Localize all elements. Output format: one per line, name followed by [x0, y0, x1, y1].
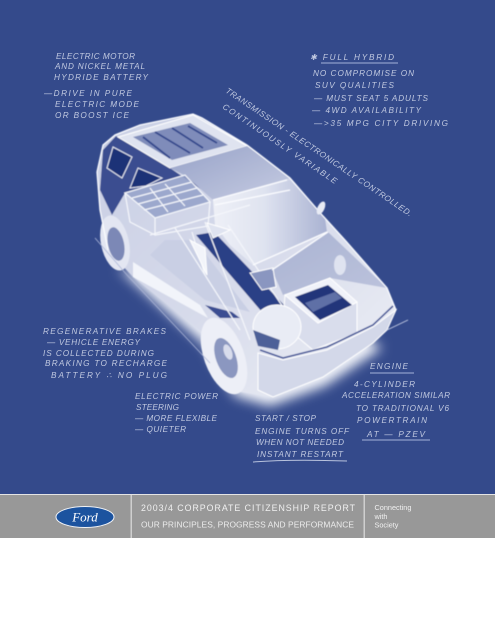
dark central band: [196, 232, 284, 318]
section name: [374, 503, 411, 530]
note: regenerative brakes: BATTERY ∴ NO PLUG: [51, 371, 168, 380]
section name: Connecting: [374, 503, 411, 512]
front wheel: [192, 312, 256, 400]
note: electric motor: HYDRIDE BATTERY: [54, 73, 149, 82]
note: full hybrid: ✱ FULL HYBRID: [310, 53, 394, 62]
body highlight edges: [97, 114, 396, 310]
Ford logo: [56, 506, 114, 528]
note: engine: 4-CYLINDER: [354, 380, 415, 389]
section name: with: [374, 512, 387, 521]
note: electric motor: [43, 52, 149, 120]
rear wheel: [95, 213, 135, 273]
mirror: [315, 200, 327, 216]
roof rack: [118, 115, 247, 168]
note: engine: ACCELERATION SIMILAR: [341, 391, 450, 400]
blueprint background: [0, 0, 495, 494]
cylinder: [334, 255, 346, 275]
note: regenerative brakes: REGENERATIVE BRAKES: [43, 327, 167, 336]
note: full hybrid: SUV QUALITIES: [315, 81, 395, 90]
note: regenerative brakes: BRAKING TO RECHARGE: [45, 359, 168, 368]
section name: Society: [374, 520, 399, 530]
note: electric motor: AND NICKEL METAL: [54, 62, 145, 71]
note: start stop: ENGINE TURNS OFF: [255, 427, 350, 436]
engine box: [283, 278, 357, 350]
note: full hybrid: — 4WD AVAILABILITY: [311, 106, 422, 115]
note: start stop: [253, 414, 350, 462]
report subtitle: OUR PRINCIPLES, PROGRESS AND PERFORMANCE: [141, 520, 354, 530]
illustration: transparent hybrid SUV: [95, 114, 408, 406]
note: full hybrid: [310, 53, 449, 128]
note: electric motor: ELECTRIC MOTOR: [56, 52, 135, 61]
note: engine: ENGINE: [370, 362, 409, 371]
note: electric power steering: — QUIETER: [134, 425, 186, 434]
hood: [272, 232, 387, 295]
leader line: [95, 238, 210, 363]
note: regenerative brakes: IS COLLECTED DURING: [43, 349, 155, 358]
car ground glow: [118, 268, 382, 406]
note: engine: TO TRADITIONAL V6: [356, 404, 449, 413]
windshield: [213, 180, 327, 265]
footer band: [0, 494, 495, 538]
roof panel: [170, 146, 290, 200]
note: electric motor: ELECTRIC MODE: [55, 100, 140, 109]
motor cluster: [253, 305, 301, 350]
note: regenerative brakes: [43, 327, 168, 380]
note: electric power steering: ELECTRIC POWER: [135, 392, 218, 401]
note: transmission: CONTINUOUSLY VARIABLE: [221, 102, 339, 186]
note: electric power steering: STEERING: [136, 403, 180, 412]
note: regenerative brakes: — VEHICLE ENERGY: [46, 338, 141, 347]
small triangles: [207, 223, 230, 238]
note: full hybrid: — MUST SEAT 5 ADULTS: [313, 94, 429, 103]
note: start stop: WHEN NOT NEEDED: [256, 438, 344, 447]
note: full hybrid: NO COMPROMISE ON: [313, 69, 414, 78]
Ford logo: Ford: [71, 510, 98, 524]
note: transmission: TRANSMISSION - ELECTRONICALLY CONTROLLED.: [224, 86, 414, 218]
note: full hybrid: —>35 MPG CITY DRIVING: [313, 119, 449, 128]
note: start stop: INSTANT RESTART: [257, 450, 344, 459]
battery box: [125, 175, 285, 340]
report title: 2003/4 CORPORATE CITIZENSHIP REPORT: [141, 503, 356, 513]
front bumper: [258, 310, 396, 397]
note: engine: AT — PZEV: [366, 430, 427, 439]
note: engine: [341, 362, 450, 440]
note: electric motor: —DRIVE IN PURE: [43, 89, 133, 98]
car body silhouette: [97, 114, 396, 397]
note: electric power steering: [134, 392, 218, 434]
note: start stop: START / STOP: [255, 414, 317, 423]
note: electric motor: OR BOOST ICE: [55, 111, 130, 120]
note: engine: POWERTRAIN: [357, 416, 427, 425]
rear windows: [107, 147, 132, 178]
front leader line: [387, 320, 408, 330]
note: electric power steering: — MORE FLEXIBLE: [134, 414, 218, 423]
side glass dark band: [100, 136, 214, 215]
